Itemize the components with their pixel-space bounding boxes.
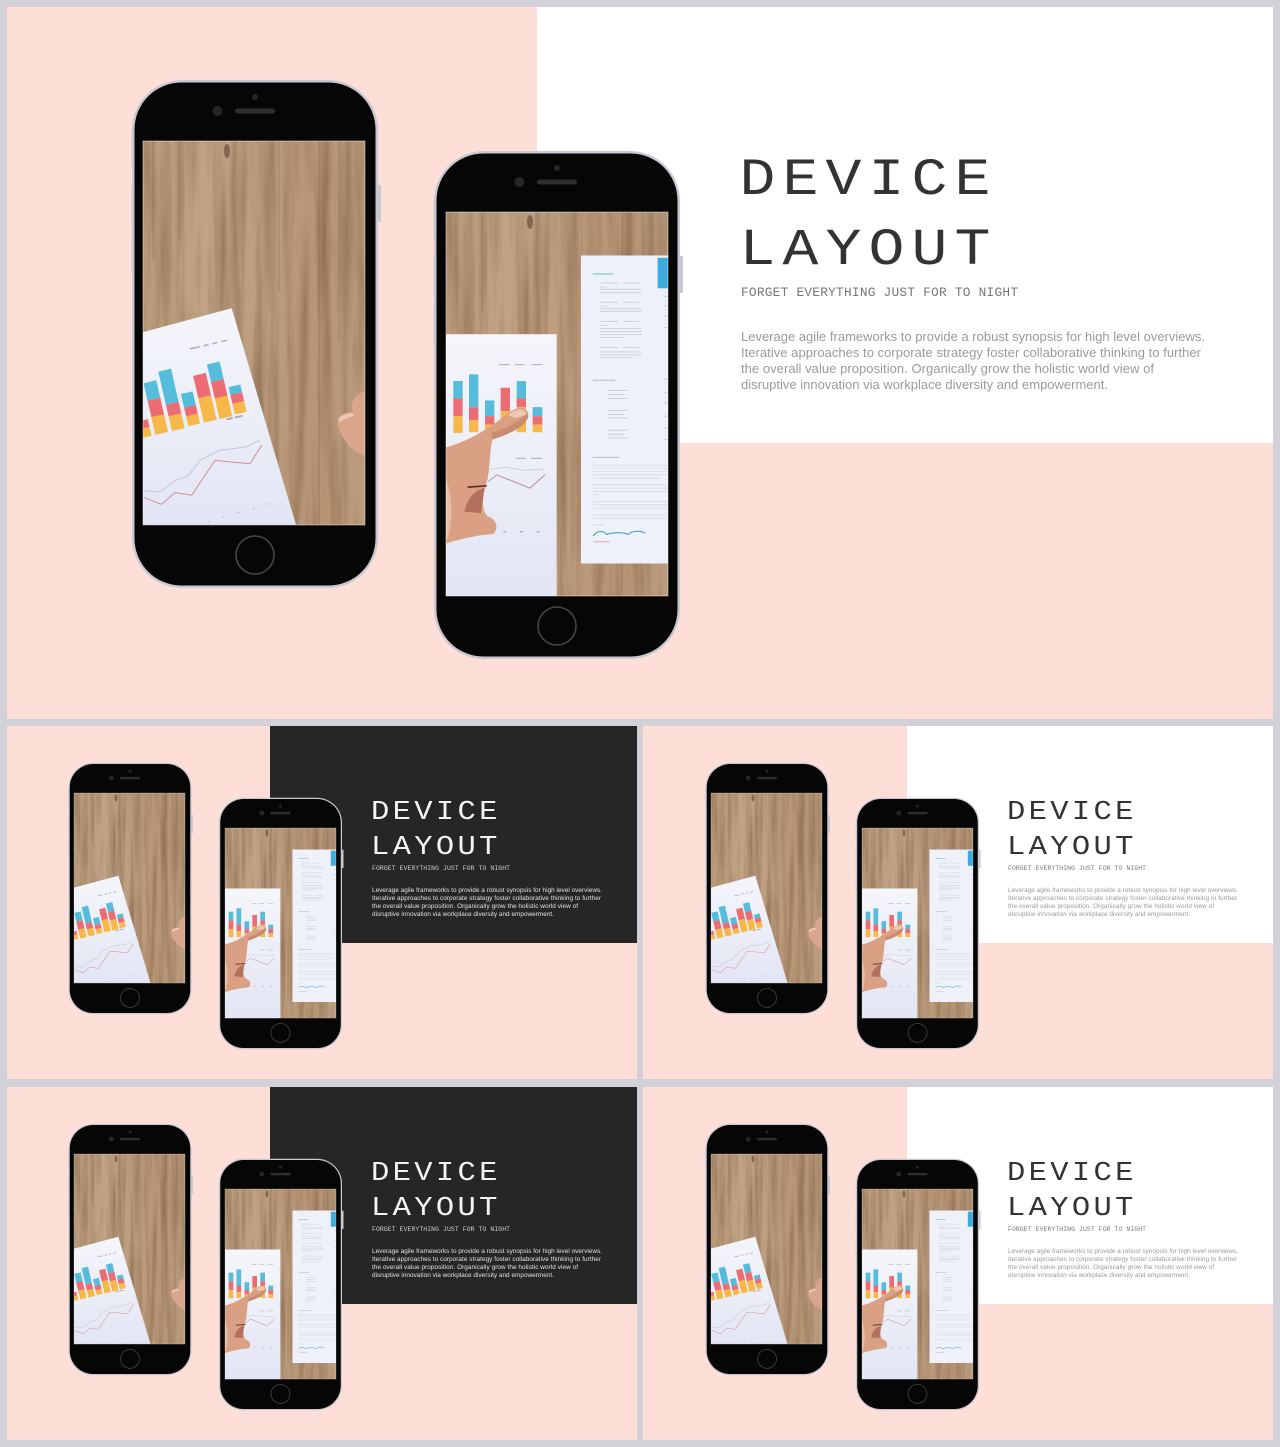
panel: main slide bbox=[7, 7, 1273, 719]
body text bbox=[372, 1248, 602, 1279]
phone: left device bbox=[700, 763, 830, 1014]
body text: disruptive innovation via workplace diversity and empowerment. bbox=[372, 911, 554, 918]
phone: left device bbox=[700, 1124, 830, 1375]
body text: the overall value proposition. Organically grow the holistic world view of bbox=[372, 903, 578, 910]
title bbox=[1007, 797, 1137, 862]
title: LAYOUT bbox=[371, 832, 501, 862]
phone: right device bbox=[218, 798, 344, 1049]
pink slide background bbox=[7, 1087, 637, 1440]
title bbox=[740, 150, 998, 280]
title: LAYOUT bbox=[740, 220, 998, 280]
dark text panel bbox=[270, 1087, 637, 1304]
white text panel bbox=[907, 726, 1273, 943]
body text bbox=[1008, 887, 1238, 918]
title: LAYOUT bbox=[1007, 832, 1137, 862]
body text: the overall value proposition. Organically grow the holistic world view of bbox=[1008, 903, 1214, 910]
white text panel bbox=[907, 1087, 1273, 1304]
subtitle: FORGET EVERYTHING JUST FOR TO NIGHT bbox=[1008, 865, 1146, 872]
title: DEVICE bbox=[1007, 797, 1137, 827]
body text: the overall value proposition. Organically grow the holistic world view of bbox=[1008, 1264, 1214, 1271]
title: DEVICE bbox=[371, 1158, 501, 1188]
pink slide background bbox=[7, 726, 637, 1079]
phone: right device bbox=[856, 1159, 980, 1410]
body text: Iterative approaches to corporate strategy foster collaborative thinking to further bbox=[1008, 895, 1238, 902]
body text: disruptive innovation via workplace diversity and empowerment. bbox=[1008, 911, 1190, 918]
body text: the overall value proposition. Organically grow the holistic world view of bbox=[372, 1264, 578, 1271]
body text: disruptive innovation via workplace diversity and empowerment. bbox=[1008, 1272, 1190, 1279]
white text panel bbox=[537, 7, 1273, 443]
phone: right device bbox=[218, 1159, 344, 1410]
dark text panel bbox=[270, 726, 637, 943]
body text: disruptive innovation via workplace diversity and empowerment. bbox=[372, 1272, 554, 1279]
phone: right device bbox=[856, 798, 980, 1049]
panel: light slide bottom right bbox=[643, 1087, 1273, 1440]
subtitle: FORGET EVERYTHING JUST FOR TO NIGHT bbox=[1008, 1226, 1146, 1233]
body text bbox=[1008, 1248, 1238, 1279]
body text: the overall value proposition. Organically grow the holistic world view of bbox=[741, 361, 1154, 376]
phone: right device bbox=[433, 151, 683, 659]
panel: dark slide top left bbox=[7, 726, 637, 1079]
body text: Leverage agile frameworks to provide a robust synopsis for high level overviews. bbox=[372, 1248, 602, 1255]
panel: light slide top right bbox=[643, 726, 1273, 1079]
title: DEVICE bbox=[371, 797, 501, 827]
title bbox=[1007, 1158, 1137, 1223]
title bbox=[371, 1158, 501, 1223]
body text: Iterative approaches to corporate strategy foster collaborative thinking to further bbox=[372, 1256, 602, 1263]
body text: Iterative approaches to corporate strategy foster collaborative thinking to further bbox=[1008, 1256, 1238, 1263]
body text bbox=[741, 329, 1205, 392]
body text: disruptive innovation via workplace diversity and empowerment. bbox=[741, 377, 1108, 392]
body text: Iterative approaches to corporate strategy foster collaborative thinking to further bbox=[372, 895, 602, 902]
body text bbox=[372, 887, 602, 918]
title: DEVICE bbox=[740, 150, 998, 210]
subtitle: FORGET EVERYTHING JUST FOR TO NIGHT bbox=[372, 865, 510, 872]
phone: left device bbox=[63, 763, 193, 1014]
panel: dark slide bottom left bbox=[7, 1087, 637, 1440]
title: DEVICE bbox=[1007, 1158, 1137, 1188]
pink slide background bbox=[7, 7, 1273, 719]
phone: left device bbox=[63, 1124, 193, 1375]
body text: Leverage agile frameworks to provide a robust synopsis for high level overviews. bbox=[372, 887, 602, 894]
title: LAYOUT bbox=[1007, 1193, 1137, 1223]
title bbox=[371, 797, 501, 862]
body text: Leverage agile frameworks to provide a robust synopsis for high level overviews. bbox=[1008, 1248, 1238, 1255]
pink slide background bbox=[643, 1087, 1273, 1440]
subtitle: FORGET EVERYTHING JUST FOR TO NIGHT bbox=[372, 1226, 510, 1233]
body text: Leverage agile frameworks to provide a robust synopsis for high level overviews. bbox=[741, 329, 1205, 344]
subtitle: FORGET EVERYTHING JUST FOR TO NIGHT bbox=[741, 285, 1018, 300]
body text: Leverage agile frameworks to provide a robust synopsis for high level overviews. bbox=[1008, 887, 1238, 894]
phone: left device bbox=[122, 80, 381, 588]
title: LAYOUT bbox=[371, 1193, 501, 1223]
pink slide background bbox=[643, 726, 1273, 1079]
body text: Iterative approaches to corporate strategy foster collaborative thinking to further bbox=[741, 345, 1202, 360]
